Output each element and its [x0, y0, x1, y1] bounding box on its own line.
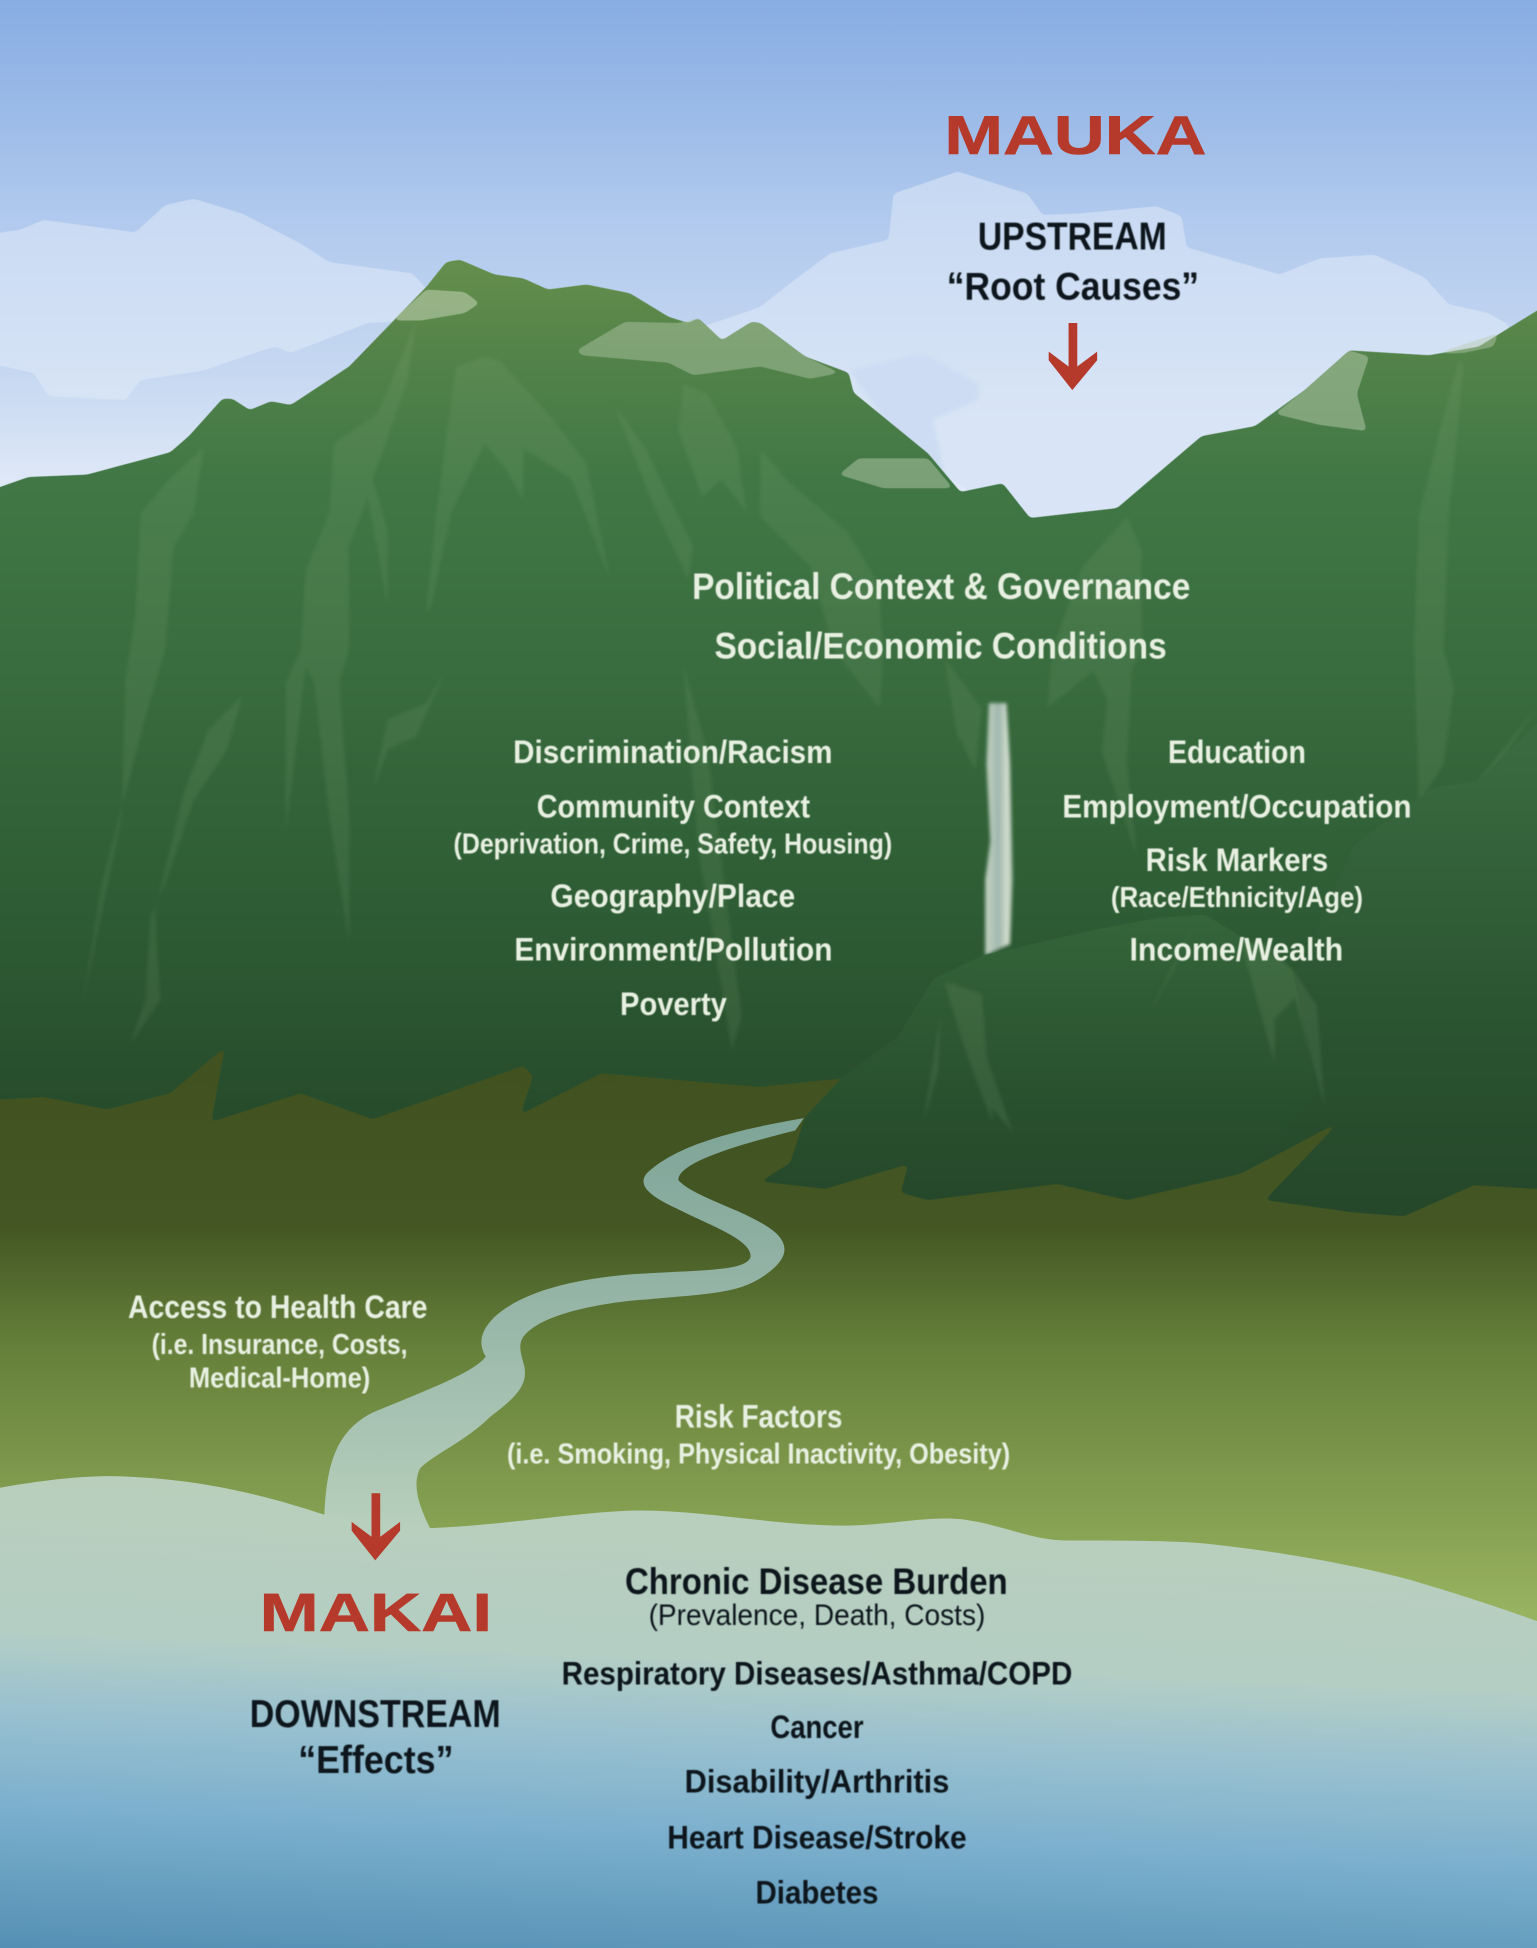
text block: right social determinants: [1062, 734, 1412, 967]
text block: access to health care: [128, 1289, 427, 1395]
heading: downstream effects: “Effects”: [298, 1739, 454, 1782]
text block: chronic disease burden: [562, 1560, 1072, 1910]
text block: left social determinants: Discrimination/Racism: [513, 734, 832, 770]
text block: chronic disease burden: (Prevalence, Death, Costs): [649, 1599, 985, 1632]
heading: Mauka: MAUKA: [944, 105, 1206, 166]
text block: access to health care: Medical-Home): [189, 1363, 370, 1395]
mountain streaks: [82, 321, 1537, 1050]
hill: left front: [760, 914, 1317, 1200]
sky background: [0, 0, 1537, 522]
mist patch: far right ridge: [1434, 333, 1498, 354]
waterfall: [985, 703, 1013, 955]
arrow: down to mountain: [1049, 323, 1097, 390]
text block: access to health care: Access to Health Care: [128, 1289, 427, 1325]
text block: chronic disease burden: Chronic Disease Burden: [625, 1560, 1008, 1602]
text block: right social determinants: Education: [1168, 734, 1306, 770]
text block: right social determinants: (Race/Ethnicity/Age): [1111, 882, 1363, 914]
text block: chronic disease burden: Respiratory Diseases/Asthma/COPD: [562, 1656, 1072, 1692]
text block: left social determinants: Environment/Pollution: [514, 931, 832, 967]
text block: chronic disease burden: Cancer: [770, 1709, 864, 1745]
text block: chronic disease burden: Diabetes: [755, 1874, 878, 1910]
shore and ocean: [0, 1476, 1537, 1948]
text block: risk factors: (i.e. Smoking, Physical Inactivity, Obesity): [507, 1438, 1010, 1470]
heading: upstream root causes: UPSTREAM: [978, 216, 1167, 259]
mist patch: saddle: [839, 458, 953, 488]
heading: downstream effects: [250, 1693, 501, 1782]
text block: risk factors: Risk Factors: [675, 1398, 842, 1434]
text block: left social determinants: Geography/Place: [550, 878, 795, 914]
foreground hill: [760, 696, 1537, 1216]
text block: political and social: [692, 565, 1190, 666]
cloud: right shadow: [850, 353, 978, 472]
text block: access to health care: (i.e. Insurance, Costs,: [152, 1329, 408, 1361]
mist patch: right ridge: [1275, 350, 1369, 431]
text block: political and social: Social/Economic Conditions: [714, 624, 1167, 666]
text block: right social determinants: Income/Wealth: [1129, 931, 1343, 967]
valley ground: [0, 1047, 1537, 1652]
text block: left social determinants: [454, 734, 892, 1022]
text block: left social determinants: Community Context: [537, 788, 810, 824]
text block: left social determinants: Poverty: [620, 986, 727, 1022]
river: [324, 1118, 804, 1531]
heading: Makai: MAKAI: [260, 1584, 492, 1643]
text block: chronic disease burden: Disability/Arthritis: [685, 1764, 949, 1800]
mist patch: summit: [393, 289, 480, 321]
text block: chronic disease burden: Heart Disease/Stroke: [667, 1820, 967, 1856]
text block: political and social: Political Context & Governance: [692, 565, 1190, 607]
cloud: left: [0, 199, 435, 400]
arrow: down to ocean: [352, 1493, 400, 1560]
mist patch: ridge: [577, 318, 840, 379]
text block: right social determinants: Risk Markers: [1146, 842, 1328, 878]
heading: upstream root causes: “Root Causes”: [947, 265, 1199, 308]
mountain range: [0, 260, 1537, 1255]
clouds: [0, 171, 1510, 534]
heading: downstream effects: DOWNSTREAM: [250, 1693, 501, 1736]
cloud: right: [696, 171, 1510, 534]
hill streaks: [923, 918, 1325, 1132]
text block: left social determinants: (Deprivation, Crime, Safety, Housing): [454, 828, 892, 860]
text block: risk factors: [507, 1398, 1010, 1470]
text block: right social determinants: Employment/Occupation: [1062, 788, 1412, 824]
heading: upstream root causes: [947, 216, 1199, 308]
